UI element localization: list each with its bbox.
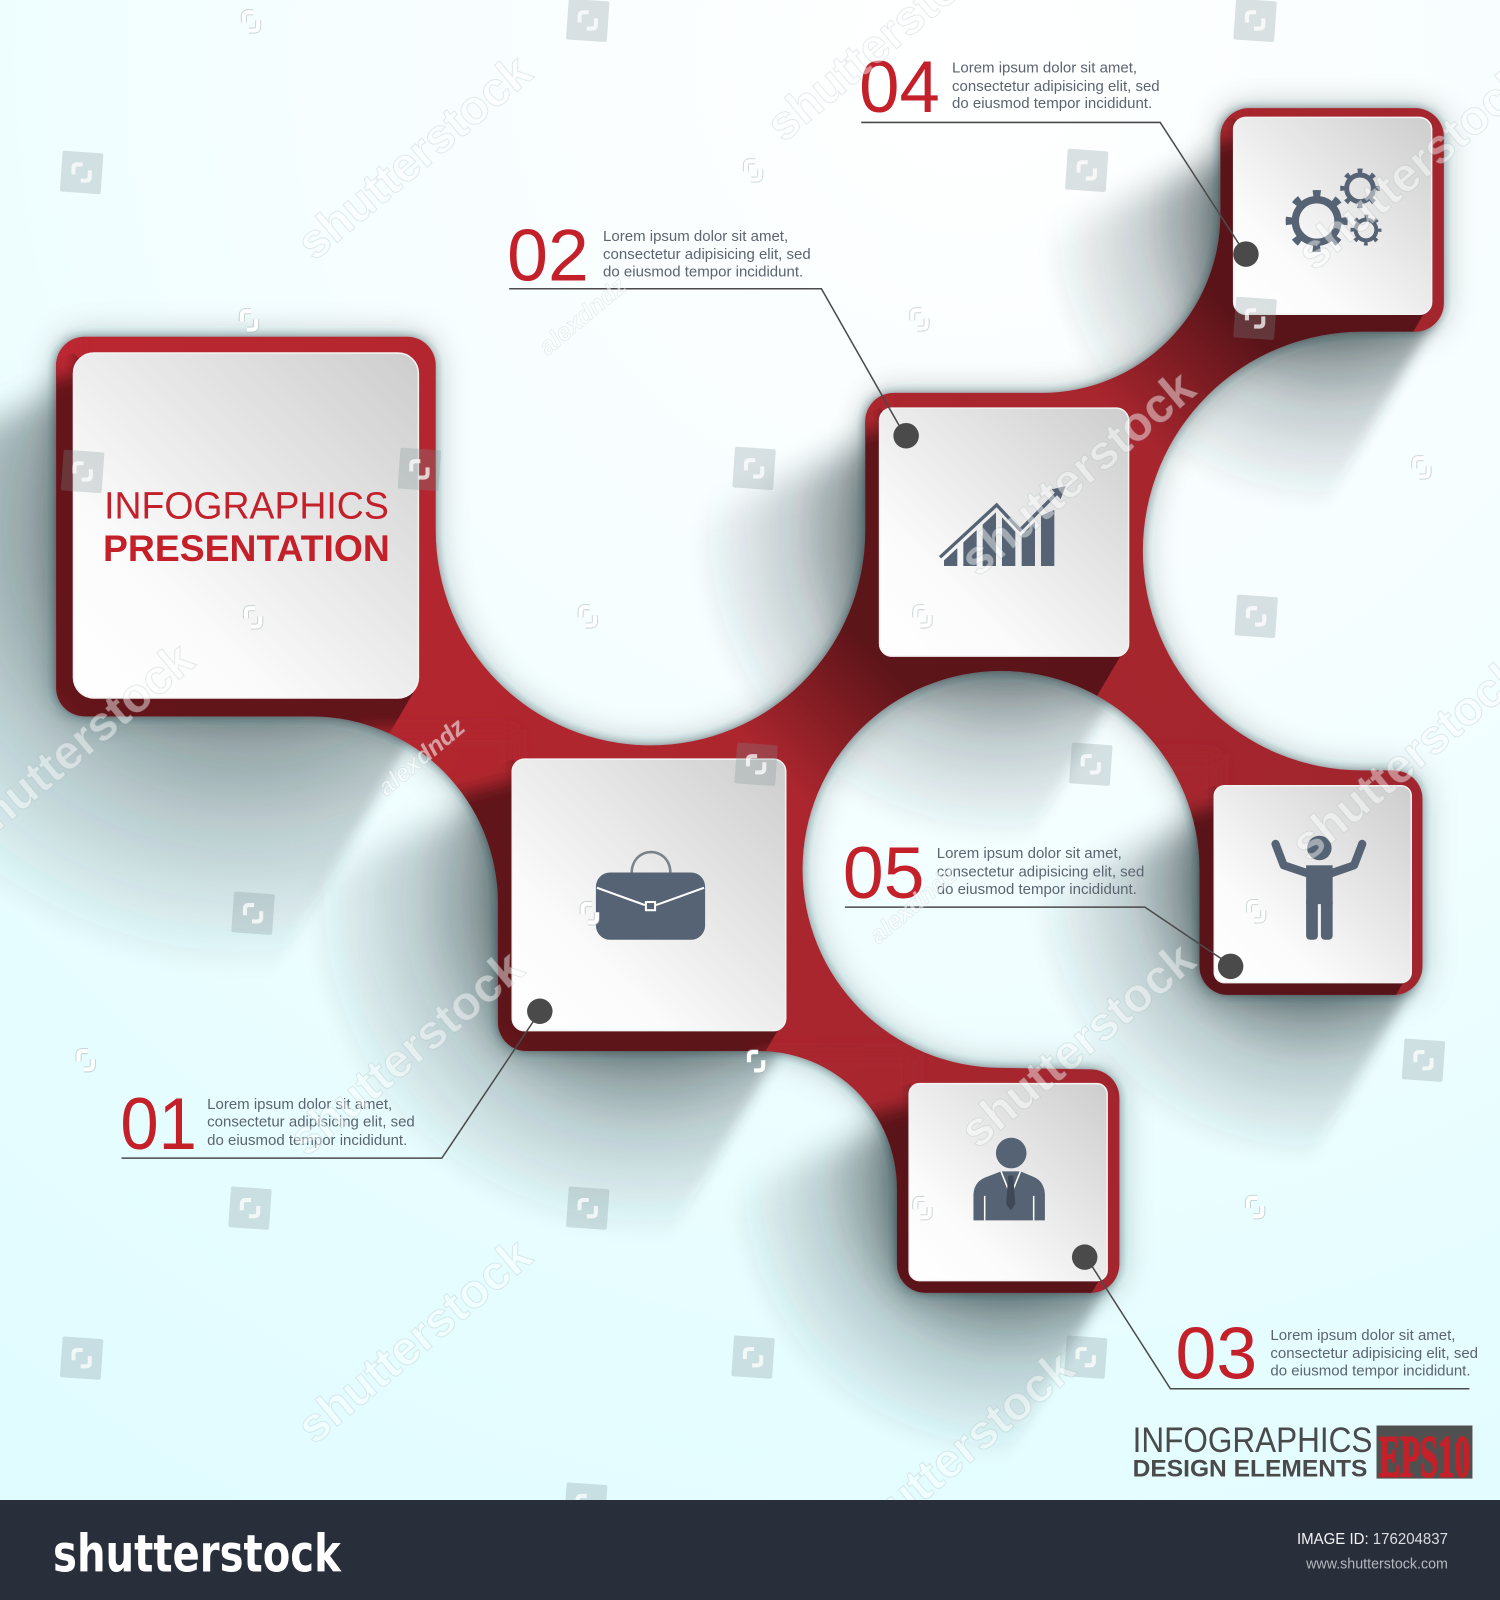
callout 04 — [859, 45, 1259, 267]
callout 01 — [120, 998, 553, 1165]
title tile — [73, 353, 418, 698]
watermark overlay: alexdndz — [534, 272, 632, 361]
site url: www.shutterstock.com — [1305, 1556, 1448, 1572]
footer bar — [0, 1500, 1500, 1600]
ambient shadow around red shape — [55, 108, 1444, 1293]
watermark overlay: shutterstock — [951, 932, 1205, 1158]
watermark overlay: shutterstock — [287, 1228, 542, 1454]
callout 03: 03 — [1176, 1312, 1257, 1395]
callout 03: Lorem ipsum dolor sit amet, — [1270, 1327, 1455, 1344]
callout 02 — [507, 214, 919, 448]
watermark overlay: shutterstock — [287, 45, 542, 270]
callout 05: consectetur adipisicing elit, sed — [937, 864, 1144, 881]
image id: IMAGE ID: 176204837 — [1297, 1531, 1448, 1548]
icon: briefcase — [596, 852, 705, 940]
businessman tile — [909, 1084, 1107, 1281]
callout 02: 02 — [507, 214, 589, 297]
person with raised arms tile — [1214, 786, 1411, 983]
callout 04: 04 — [859, 45, 940, 128]
callout 04: consectetur adipisicing elit, sed — [952, 78, 1160, 95]
callout 04: do eiusmod tempor incididunt. — [952, 95, 1152, 112]
icon: businessman — [973, 1138, 1045, 1220]
watermark overlay: shutterstock — [830, 1340, 1085, 1566]
briefcase tile — [512, 759, 786, 1031]
design elements logo — [1133, 1421, 1472, 1490]
callout 01: consectetur adipisicing elit, sed — [207, 1114, 415, 1131]
callout 01: 01 — [120, 1082, 197, 1165]
title text: INFOGRAPHICS — [104, 484, 389, 526]
callout 01: do eiusmod tempor incididunt. — [207, 1132, 407, 1149]
footer logo: shutterstock — [53, 1524, 342, 1584]
icon: person raising arms — [1276, 836, 1362, 940]
callout 02: consectetur adipisicing elit, sed — [603, 246, 811, 263]
chart tile — [880, 408, 1129, 656]
design elements logo: INFOGRAPHICS — [1133, 1421, 1372, 1460]
callout 03: consectetur adipisicing elit, sed — [1270, 1345, 1478, 1362]
design elements logo: DESIGN ELEMENTS — [1133, 1456, 1367, 1483]
red connector shape — [56, 108, 1444, 1293]
callout 05: Lorem ipsum dolor sit amet, — [937, 845, 1122, 862]
callout 03 — [1072, 1244, 1478, 1395]
icon: rising bar chart — [940, 486, 1066, 566]
title text — [103, 484, 390, 569]
callout 05: do eiusmod tempor incididunt. — [937, 881, 1137, 898]
callout 04: Lorem ipsum dolor sit amet, — [952, 59, 1137, 76]
watermark overlay: alexdndz — [865, 861, 963, 949]
gears tile — [1234, 117, 1432, 314]
callout 01: Lorem ipsum dolor sit amet, — [207, 1096, 392, 1113]
watermark overlay: shutterstock — [951, 361, 1205, 587]
title text: PRESENTATION — [103, 528, 390, 569]
callout 05: 05 — [843, 831, 924, 914]
callout 02: Lorem ipsum dolor sit amet, — [603, 228, 788, 245]
callout 02: do eiusmod tempor incididunt. — [603, 264, 803, 281]
watermark overlay: shutterstock — [279, 940, 534, 1166]
watermark overlay: alexdndz — [373, 713, 471, 802]
icon: gears — [1290, 171, 1379, 248]
callout 03: do eiusmod tempor incididunt. — [1270, 1363, 1471, 1380]
callout 05 — [843, 831, 1243, 979]
